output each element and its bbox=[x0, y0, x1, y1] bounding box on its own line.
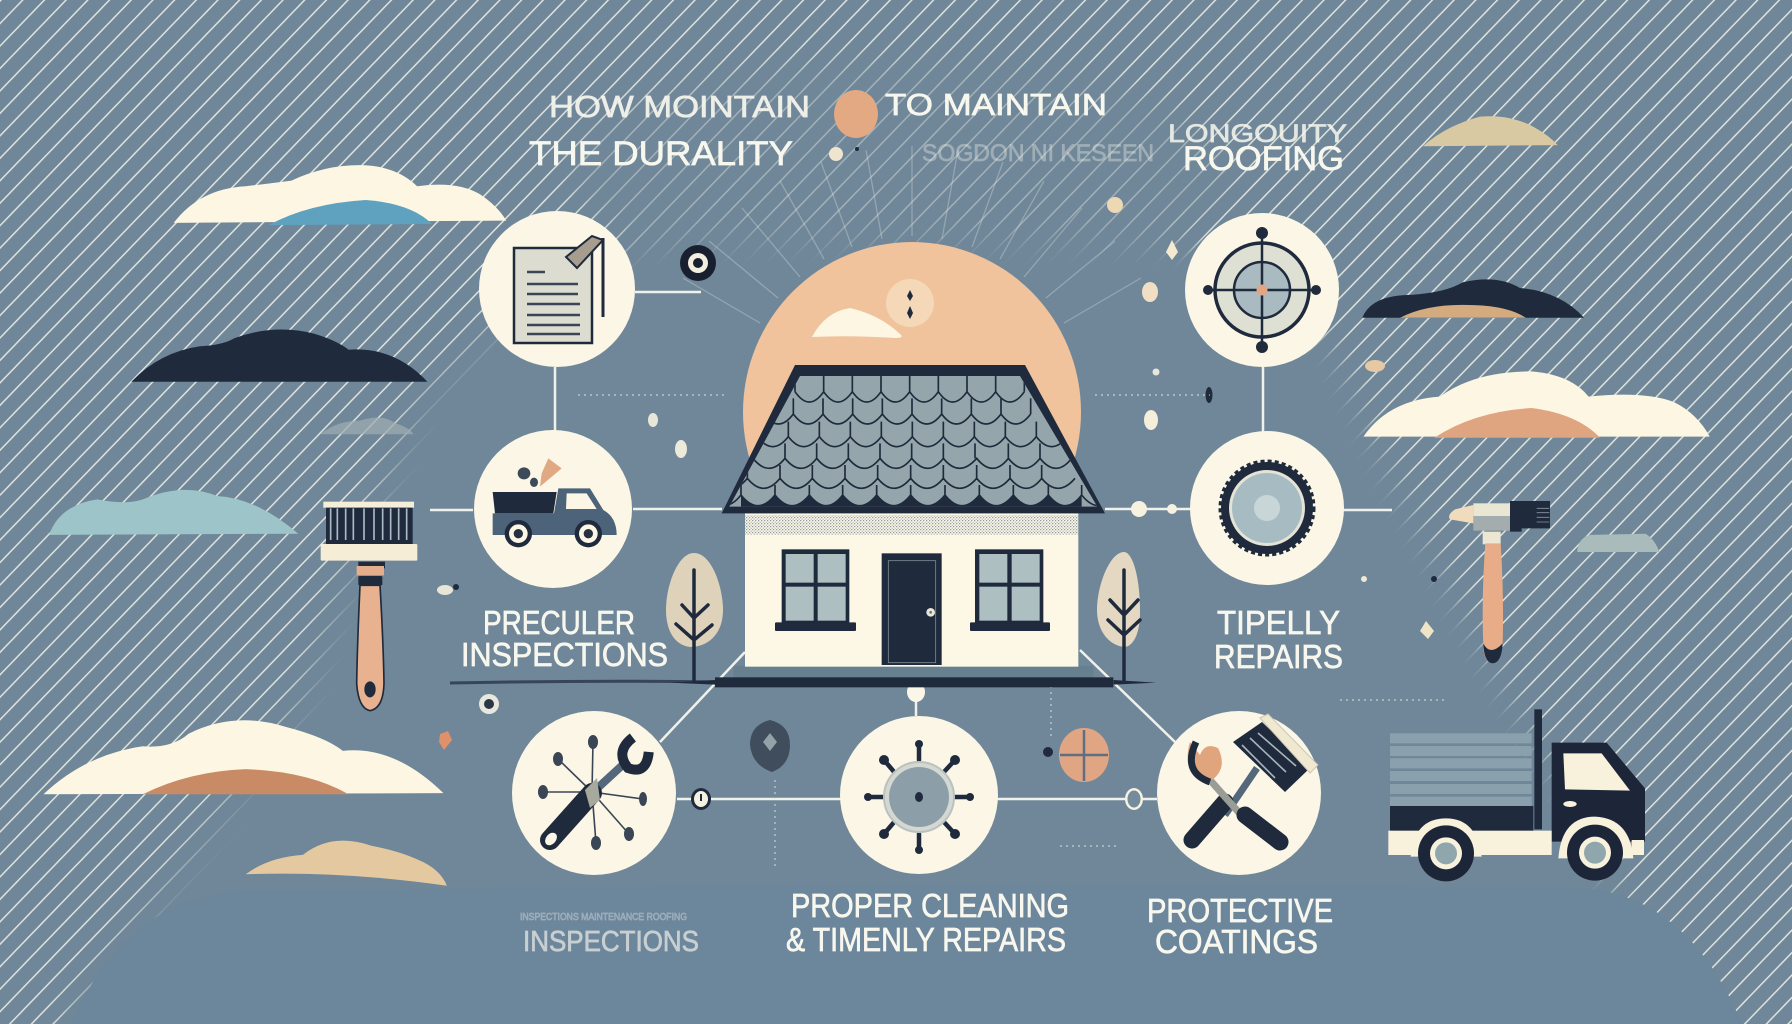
icon: dump truck bbox=[493, 458, 617, 547]
label: proper cleaning and timely repairs: & TIMENLY REPAIRS bbox=[786, 921, 1066, 958]
truck chassis bbox=[1388, 817, 1644, 858]
icon circle: tools bbox=[1157, 711, 1321, 875]
label: preculer inspections: INSPECTIONS bbox=[461, 636, 668, 673]
icon: ship-wheel gear bbox=[864, 740, 974, 854]
faded title fragment: SOGDON NI KESEEN bbox=[922, 140, 1154, 167]
radiating rays bbox=[683, 146, 1141, 323]
label: faded inspections: INSPECTIONS bbox=[523, 926, 699, 958]
right window bbox=[970, 549, 1050, 631]
marker: diamond pin bbox=[750, 720, 790, 772]
icon: tyre disc bbox=[1221, 462, 1313, 554]
label: tipelly repairs bbox=[1214, 604, 1343, 675]
truck cab bbox=[1552, 743, 1645, 842]
label: proper cleaning and timely repairs bbox=[786, 887, 1069, 958]
label: preculer inspections: PRECULER bbox=[483, 604, 635, 641]
cloud: teal bbox=[49, 490, 298, 535]
cloud: small gray, right bbox=[1577, 534, 1659, 552]
large delivery truck bbox=[1388, 709, 1645, 881]
icon circle: wheel bbox=[1190, 431, 1344, 585]
label: faded inspections: INSPECTIONS MAINTENANCE ROOFING bbox=[520, 912, 687, 923]
icon circle: compass bbox=[1185, 213, 1339, 367]
marker: peach disc bbox=[1059, 728, 1109, 782]
title line: longevity: LONGOUITY bbox=[1168, 120, 1347, 148]
label: protective coatings: PROTECTIVE bbox=[1147, 892, 1333, 929]
icon: compass dial bbox=[1203, 227, 1321, 353]
cloud: dark bbox=[131, 330, 427, 382]
icon circle: gear bbox=[840, 716, 998, 874]
title line: how maintain: HOW MOINTAIN bbox=[549, 89, 810, 124]
label: tipelly repairs: REPAIRS bbox=[1214, 638, 1343, 675]
label: preculer inspections bbox=[461, 604, 668, 673]
icon circle: wrench bbox=[512, 711, 676, 875]
connector nodes bbox=[437, 197, 1437, 810]
title line: the durality: THE DURALITY bbox=[529, 135, 793, 173]
house bbox=[670, 365, 1157, 687]
cloud: cream with peach, right bbox=[1363, 371, 1710, 438]
cloud: tan bbox=[246, 841, 447, 886]
label: protective coatings: COATINGS bbox=[1155, 923, 1318, 960]
right hammer brush bbox=[1449, 501, 1550, 663]
icon circle: truck bbox=[474, 430, 632, 588]
label: faded inspections bbox=[520, 912, 699, 958]
title line: roofing: ROOFING bbox=[1183, 140, 1344, 178]
title bbox=[529, 87, 1347, 178]
truck cargo base and post bbox=[1390, 709, 1542, 831]
truck cargo stripes bbox=[1390, 733, 1532, 806]
icon circle: document bbox=[479, 211, 635, 367]
door bbox=[882, 553, 942, 665]
cloud: cream with blue, upper left bbox=[174, 165, 506, 225]
connector lines bbox=[430, 292, 1392, 799]
icon: crossed wrench and brush bbox=[1188, 714, 1318, 842]
dotted guide lines bbox=[578, 395, 1448, 870]
egg ornament in title bbox=[829, 90, 878, 161]
roof bbox=[707, 365, 1115, 513]
title line: to maintain: TO MAINTAIN bbox=[885, 87, 1107, 122]
bottom ground hump bbox=[72, 885, 1742, 1024]
cloud: cream with brown, lower left bbox=[43, 720, 443, 794]
left tree bbox=[666, 553, 723, 680]
label: tipelly repairs: TIPELLY bbox=[1217, 604, 1340, 641]
house wall bbox=[745, 513, 1078, 667]
house base bbox=[670, 666, 1157, 687]
truck wheels bbox=[1418, 825, 1623, 881]
clouds bbox=[43, 116, 1710, 886]
cloud: faint gray bbox=[320, 418, 414, 434]
cloud: tan, upper right bbox=[1423, 116, 1558, 146]
shadow line bbox=[450, 681, 720, 683]
icon: checklist document bbox=[514, 236, 603, 343]
right tree bbox=[1097, 552, 1140, 680]
label: protective coatings bbox=[1147, 892, 1333, 960]
icon: wrench with spokes bbox=[538, 734, 653, 850]
cloud: dark with tan, right bbox=[1362, 279, 1584, 318]
sun dome behind house bbox=[743, 242, 1081, 582]
small cloud on dome bbox=[812, 279, 934, 338]
left paint brush bbox=[321, 502, 417, 711]
label: proper cleaning and timely repairs: PROPER CLEANING bbox=[791, 887, 1069, 924]
left window bbox=[775, 549, 856, 631]
roof tiles bbox=[730, 376, 1097, 506]
